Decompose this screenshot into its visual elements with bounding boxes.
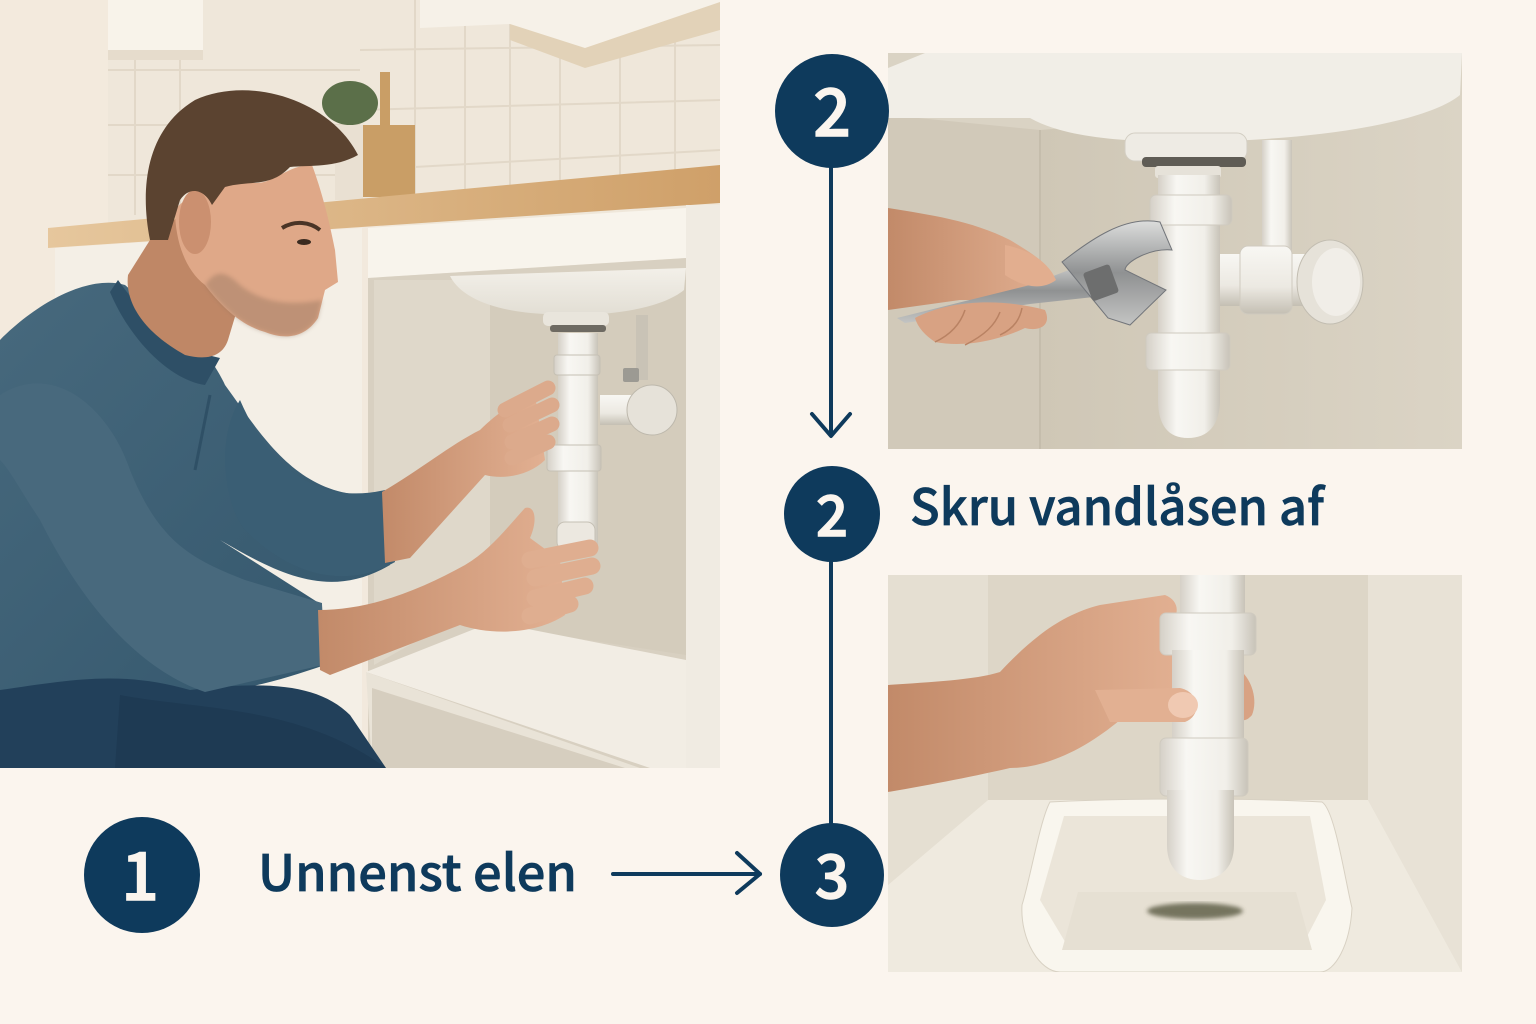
- badge: step 3: [780, 823, 884, 927]
- heading: step 1 label: Unnenst elen: [258, 834, 577, 906]
- cabinet: [55, 205, 720, 768]
- counter top: [48, 165, 720, 248]
- panel: man fitting the trap under the sink: [0, 0, 720, 768]
- sink underside: [888, 53, 1462, 142]
- cutting board and plant: [322, 72, 415, 200]
- panel: wrench on the slip nut: [888, 53, 1462, 449]
- man: forearms and hands: [318, 388, 592, 675]
- panel: trap removed over a basin: [888, 575, 1462, 972]
- man: torso and arms: [0, 280, 395, 768]
- thumb in front of the trap: [1095, 688, 1198, 722]
- badge: step 1: 1: [121, 824, 159, 920]
- hand fingers behind the trap: [888, 595, 1254, 792]
- badge: step 3: 3: [815, 829, 849, 916]
- badge: top 2: [775, 54, 889, 168]
- badge: step 2: 2: [816, 472, 848, 553]
- man: neck and head: [128, 90, 358, 357]
- trap pipe assembly: [543, 312, 677, 550]
- sink bowl: [450, 268, 686, 315]
- arrow: step 1 label to badge 3: [613, 853, 760, 893]
- basin with debris: [1022, 799, 1352, 972]
- badge: step 1: [84, 817, 200, 933]
- badge: top 2: 2: [813, 60, 851, 156]
- white trap pipes: [1125, 133, 1363, 438]
- removed white trap: [1160, 575, 1256, 880]
- badge: step 2: [784, 466, 880, 562]
- hand with adjustable wrench: [888, 208, 1172, 345]
- heading: step 2 label: Skru vandlåsen af: [910, 468, 1326, 540]
- connector: arrow from badge 2 down to step 2: [812, 140, 850, 436]
- connector: line from step 2 to badge 3: [829, 540, 833, 850]
- kitchen wall with tiles: [108, 0, 720, 215]
